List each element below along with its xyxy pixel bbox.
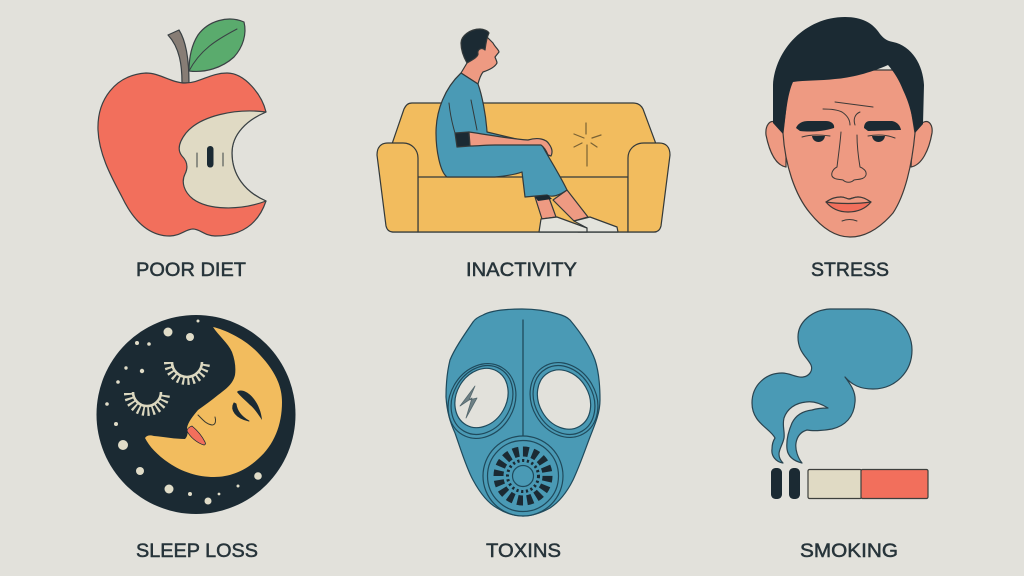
panel: smoking [752,309,928,499]
icon: mask centre seam [522,320,524,436]
icon: green leaf [189,19,245,71]
icon: forehead wrinkles [823,102,873,125]
icon: eyelashes [128,362,206,411]
panel: stress [766,17,932,237]
icon: hair [773,17,924,134]
panel: inactivity [377,29,670,232]
icon: gas mask body [446,309,600,516]
icon: smoke plume [752,309,912,463]
icon: right lens [517,350,611,450]
label: sleep loss: SLEEP LOSS [136,541,258,562]
panel: poor diet [98,19,266,236]
icon: night disc [96,315,296,514]
icon: eyebrows [796,121,901,132]
icon: chin line [842,220,857,221]
label: poor diet: POOR DIET [136,260,246,281]
icon: cigarette filter pills [771,468,800,499]
label: toxins: TOXINS [486,541,561,562]
icon: stars [105,320,262,504]
icon: face [783,70,915,237]
icon: lips [826,197,871,212]
icon: crescent moon face [145,327,282,477]
icon: bitten apple [98,73,266,236]
icon: sofa sparkle [574,123,601,166]
icon: cigarette body [808,470,928,498]
label: smoking: SMOKING [800,541,898,562]
icon: ears [766,122,932,167]
icon: seated man [436,29,618,232]
icon: moon nose [198,415,216,425]
icon: left lens with crack [435,351,529,451]
icon: yellow sofa [377,103,670,232]
label: stress: STRESS [811,260,889,281]
icon: mask filter [483,436,563,516]
panel: sleep loss [96,315,296,514]
icon: apple stem [168,30,189,83]
label: inactivity: INACTIVITY [466,260,577,281]
panel: toxins [435,309,611,516]
icon: nose [832,132,866,182]
icon: moon eyebrow and closed eye [233,390,262,421]
icon: eyes [802,135,895,142]
icon: moon lips [187,426,205,445]
